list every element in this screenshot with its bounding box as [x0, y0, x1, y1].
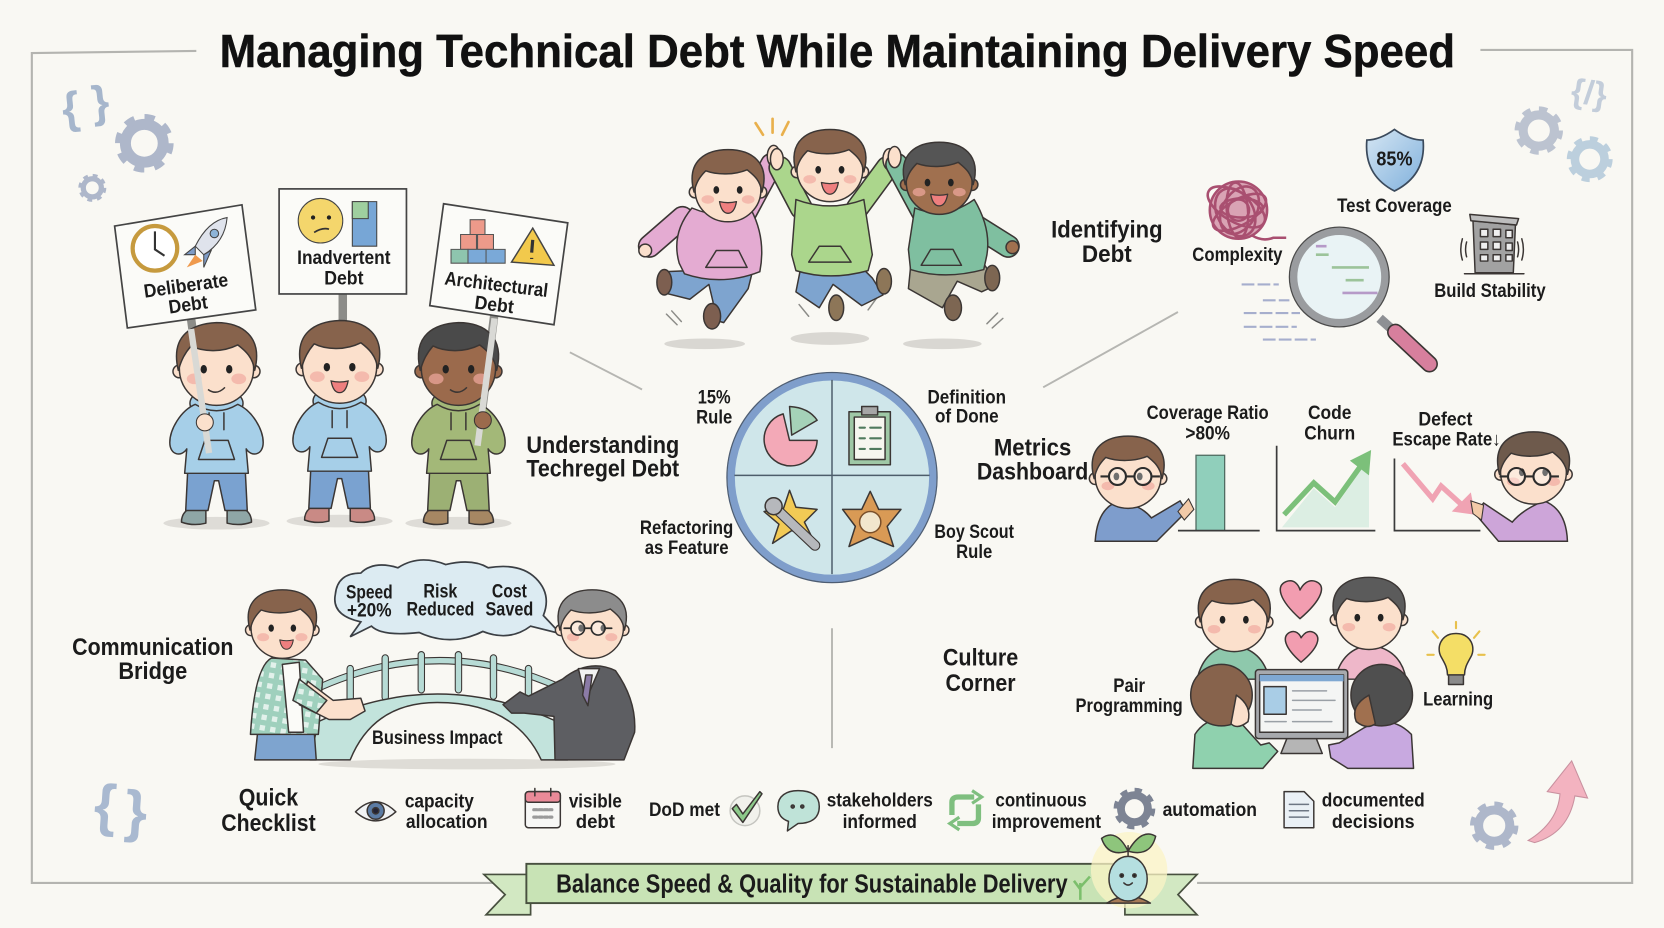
line chart: defect escape rate: Defect [1418, 410, 1473, 431]
heading: culture corner [943, 644, 1018, 697]
heading: understanding technical debt: Understanding [526, 432, 679, 459]
label: 15% rule [696, 387, 732, 428]
banner: balance speed and quality [484, 832, 1197, 915]
illustration: three kids jumping high five [639, 119, 1019, 349]
item: stakeholders informed: stakeholders [827, 791, 933, 812]
speech cloud: Reduced [406, 600, 474, 621]
panel: communication bridge [72, 560, 635, 769]
speech cloud: Saved [486, 600, 533, 621]
item: visible debt [569, 792, 622, 833]
panel: culture corner [943, 577, 1493, 768]
person: developer [245, 590, 365, 760]
title: Managing Technical Debt While Maintaining Delivery Speed [220, 25, 1455, 77]
heading: communication bridge: Communication [72, 634, 233, 661]
icon: automation gear [1117, 791, 1152, 826]
heading: culture corner: Corner [946, 670, 1016, 697]
icon: building [1461, 214, 1524, 274]
line chart: code churn [1277, 403, 1375, 531]
icon: shield 85% [1367, 129, 1423, 191]
label: 15% rule: Rule [696, 407, 732, 428]
sign: architectural debt: Debt [473, 293, 515, 318]
item: capacity allocation: allocation [406, 812, 488, 833]
ribbon tails [484, 874, 1197, 915]
label: pair programming: Programming [1076, 696, 1183, 717]
item: capacity allocation: capacity [405, 792, 474, 813]
heading: understanding technical debt: Techregel Debt [526, 455, 679, 482]
panel: core practices wheel [640, 372, 1015, 583]
item: stakeholders informed [827, 791, 933, 833]
icon: chat bubble [778, 791, 819, 831]
bar chart: coverage ratio: >80% [1185, 423, 1230, 444]
kid: pink hoodie [639, 145, 780, 329]
icon: sprout mascot [1091, 832, 1167, 908]
item: stakeholders informed: informed [843, 812, 917, 833]
label: definition of done [928, 387, 1006, 427]
icon: pie chart [764, 406, 817, 466]
icon: document [1284, 792, 1314, 828]
illustration: bridge [310, 655, 616, 769]
icon: scout badge [843, 491, 901, 547]
label: test coverage: Test Coverage [1337, 196, 1452, 217]
label: 15% rule: 15% [698, 387, 731, 408]
item: dod met: DoD met [649, 800, 721, 821]
speech cloud: Speed [346, 583, 393, 604]
icon: tangled yarn [1201, 178, 1286, 243]
label: boy scout rule: Rule [956, 542, 992, 563]
panel: understanding technical debt [115, 189, 679, 530]
panel: identifying debt [1051, 129, 1546, 364]
bottom right teammate [1329, 664, 1414, 768]
heading: identifying debt [1051, 217, 1163, 268]
item: documented decisions [1322, 791, 1425, 833]
decorative braces: } [123, 779, 149, 845]
heading: metrics dashboard [977, 434, 1088, 486]
heading: understanding technical debt [526, 432, 679, 482]
icon: light bulb [1427, 622, 1485, 684]
decorative: top-right code braces and gears: {/} [1569, 72, 1610, 114]
icon: code lines [1242, 284, 1316, 340]
bottom left teammate [1191, 664, 1278, 768]
motion lines [666, 298, 1003, 328]
heading: identifying debt: Identifying [1051, 217, 1163, 244]
decorative gear bottom right [1474, 805, 1515, 846]
icon: small sprout [1074, 877, 1090, 900]
bar chart: coverage ratio [1147, 403, 1269, 531]
label: definition of done: of Done [935, 406, 999, 427]
label: business impact: Business Impact [372, 728, 503, 749]
label: learning: Learning [1423, 690, 1493, 711]
icon: magnifying glass [1289, 227, 1429, 364]
label: boy scout rule [934, 522, 1015, 563]
arrow: upward growth [1528, 761, 1588, 843]
bar chart: coverage ratio: Coverage Ratio [1147, 403, 1269, 424]
speech cloud [335, 560, 560, 640]
wheel circle [727, 372, 937, 583]
item: continuous improvement: improvement [992, 812, 1102, 833]
heading: quick checklist: Quick [239, 784, 299, 811]
sign: deliberate debt [115, 205, 256, 328]
label: refactoring as feature: Refactoring [640, 518, 733, 539]
sign poles foreground [191, 318, 495, 453]
icon: continuous cycle arrows [950, 791, 982, 830]
item: continuous improvement: continuous [995, 791, 1087, 812]
panel: quick checklist [92, 773, 1425, 845]
banner text: Balance Speed & Quality for Sustainable Delivery [556, 870, 1068, 898]
line chart: defect escape rate: Escape Rate↓ [1392, 430, 1501, 451]
line chart: code churn: Code [1308, 403, 1351, 424]
label: definition of done: Definition [928, 387, 1006, 408]
top left teammate [1195, 579, 1273, 679]
sparkle lines [756, 119, 788, 135]
label: refactoring as feature: as Feature [645, 538, 729, 559]
label: refactoring as feature [640, 518, 733, 559]
icon: clipboard checklist [849, 406, 890, 465]
heading: communication bridge: Bridge [118, 658, 187, 685]
sign poles [191, 294, 495, 453]
item: visible debt: visible [569, 792, 622, 813]
connector lines [570, 312, 1178, 748]
speech cloud: Cost [492, 581, 527, 602]
icon: check mark [730, 792, 762, 826]
label: complexity: Complexity [1192, 245, 1283, 266]
kid: architectural debt [405, 323, 512, 530]
heading: quick checklist [221, 784, 316, 837]
ground shadows [664, 332, 982, 349]
person pointing left chart [1089, 436, 1194, 541]
hearts [1280, 581, 1321, 662]
monitor [1255, 670, 1348, 753]
icon: calendar [525, 788, 560, 828]
item: automation: automation [1163, 800, 1257, 821]
panel: metrics dashboard [977, 403, 1572, 541]
kid: inadvertent debt [287, 320, 393, 527]
heading: metrics dashboard: Dashboard [977, 459, 1088, 486]
heading: quick checklist: Checklist [221, 810, 316, 837]
line chart: defect escape rate [1392, 410, 1501, 531]
sign: architectural debt [430, 204, 568, 325]
icon: shield 85%: 85% [1376, 149, 1413, 171]
sign: inadvertent debt [279, 189, 406, 294]
heading: culture corner: Culture [943, 644, 1018, 671]
item: continuous improvement [992, 791, 1102, 833]
decorative: top-left code braces and gears: } [89, 77, 112, 128]
person pointing right chart [1471, 432, 1572, 541]
top right teammate [1330, 577, 1408, 679]
label: pair programming: Pair [1113, 676, 1146, 697]
item: capacity allocation [405, 792, 488, 833]
person: business manager [503, 590, 635, 760]
decorative: top-left code braces and gears: { [59, 83, 82, 134]
sign: architectural debt: Architectural [443, 269, 549, 302]
ribbon body [526, 864, 1125, 903]
label: boy scout rule: Boy Scout [934, 522, 1015, 543]
decorative braces [92, 773, 149, 845]
sign: inadvertent debt: Inadvertent [297, 248, 391, 269]
heading: communication bridge [72, 634, 233, 685]
kid: green hoodie [770, 129, 896, 320]
sign: inadvertent debt: Debt [324, 268, 364, 289]
sign: deliberate debt: Debt [167, 292, 210, 319]
icon: wrench and star [764, 490, 817, 545]
decorative braces: { [92, 773, 119, 838]
sign: deliberate debt: Deliberate [143, 270, 230, 303]
label: build stability: Build Stability [1434, 281, 1546, 302]
line chart: code churn: Churn [1304, 423, 1355, 444]
heading: identifying debt: Debt [1082, 241, 1132, 268]
kid: deliberate debt [163, 323, 270, 530]
heading: metrics dashboard: Metrics [994, 434, 1071, 461]
kid: teal hoodie [888, 142, 1019, 320]
speech cloud: +20% [347, 601, 392, 622]
item: visible debt: debt [576, 812, 616, 833]
label: pair programming [1076, 676, 1183, 717]
icon: eye [356, 802, 396, 821]
decorative: top-left code braces and gears [59, 77, 169, 200]
item: documented decisions: decisions [1332, 812, 1415, 833]
sign hands [196, 414, 213, 431]
speech cloud: Risk [423, 581, 458, 602]
item: documented decisions: documented [1322, 791, 1425, 812]
decorative: top-right code braces and gears [1518, 72, 1610, 179]
